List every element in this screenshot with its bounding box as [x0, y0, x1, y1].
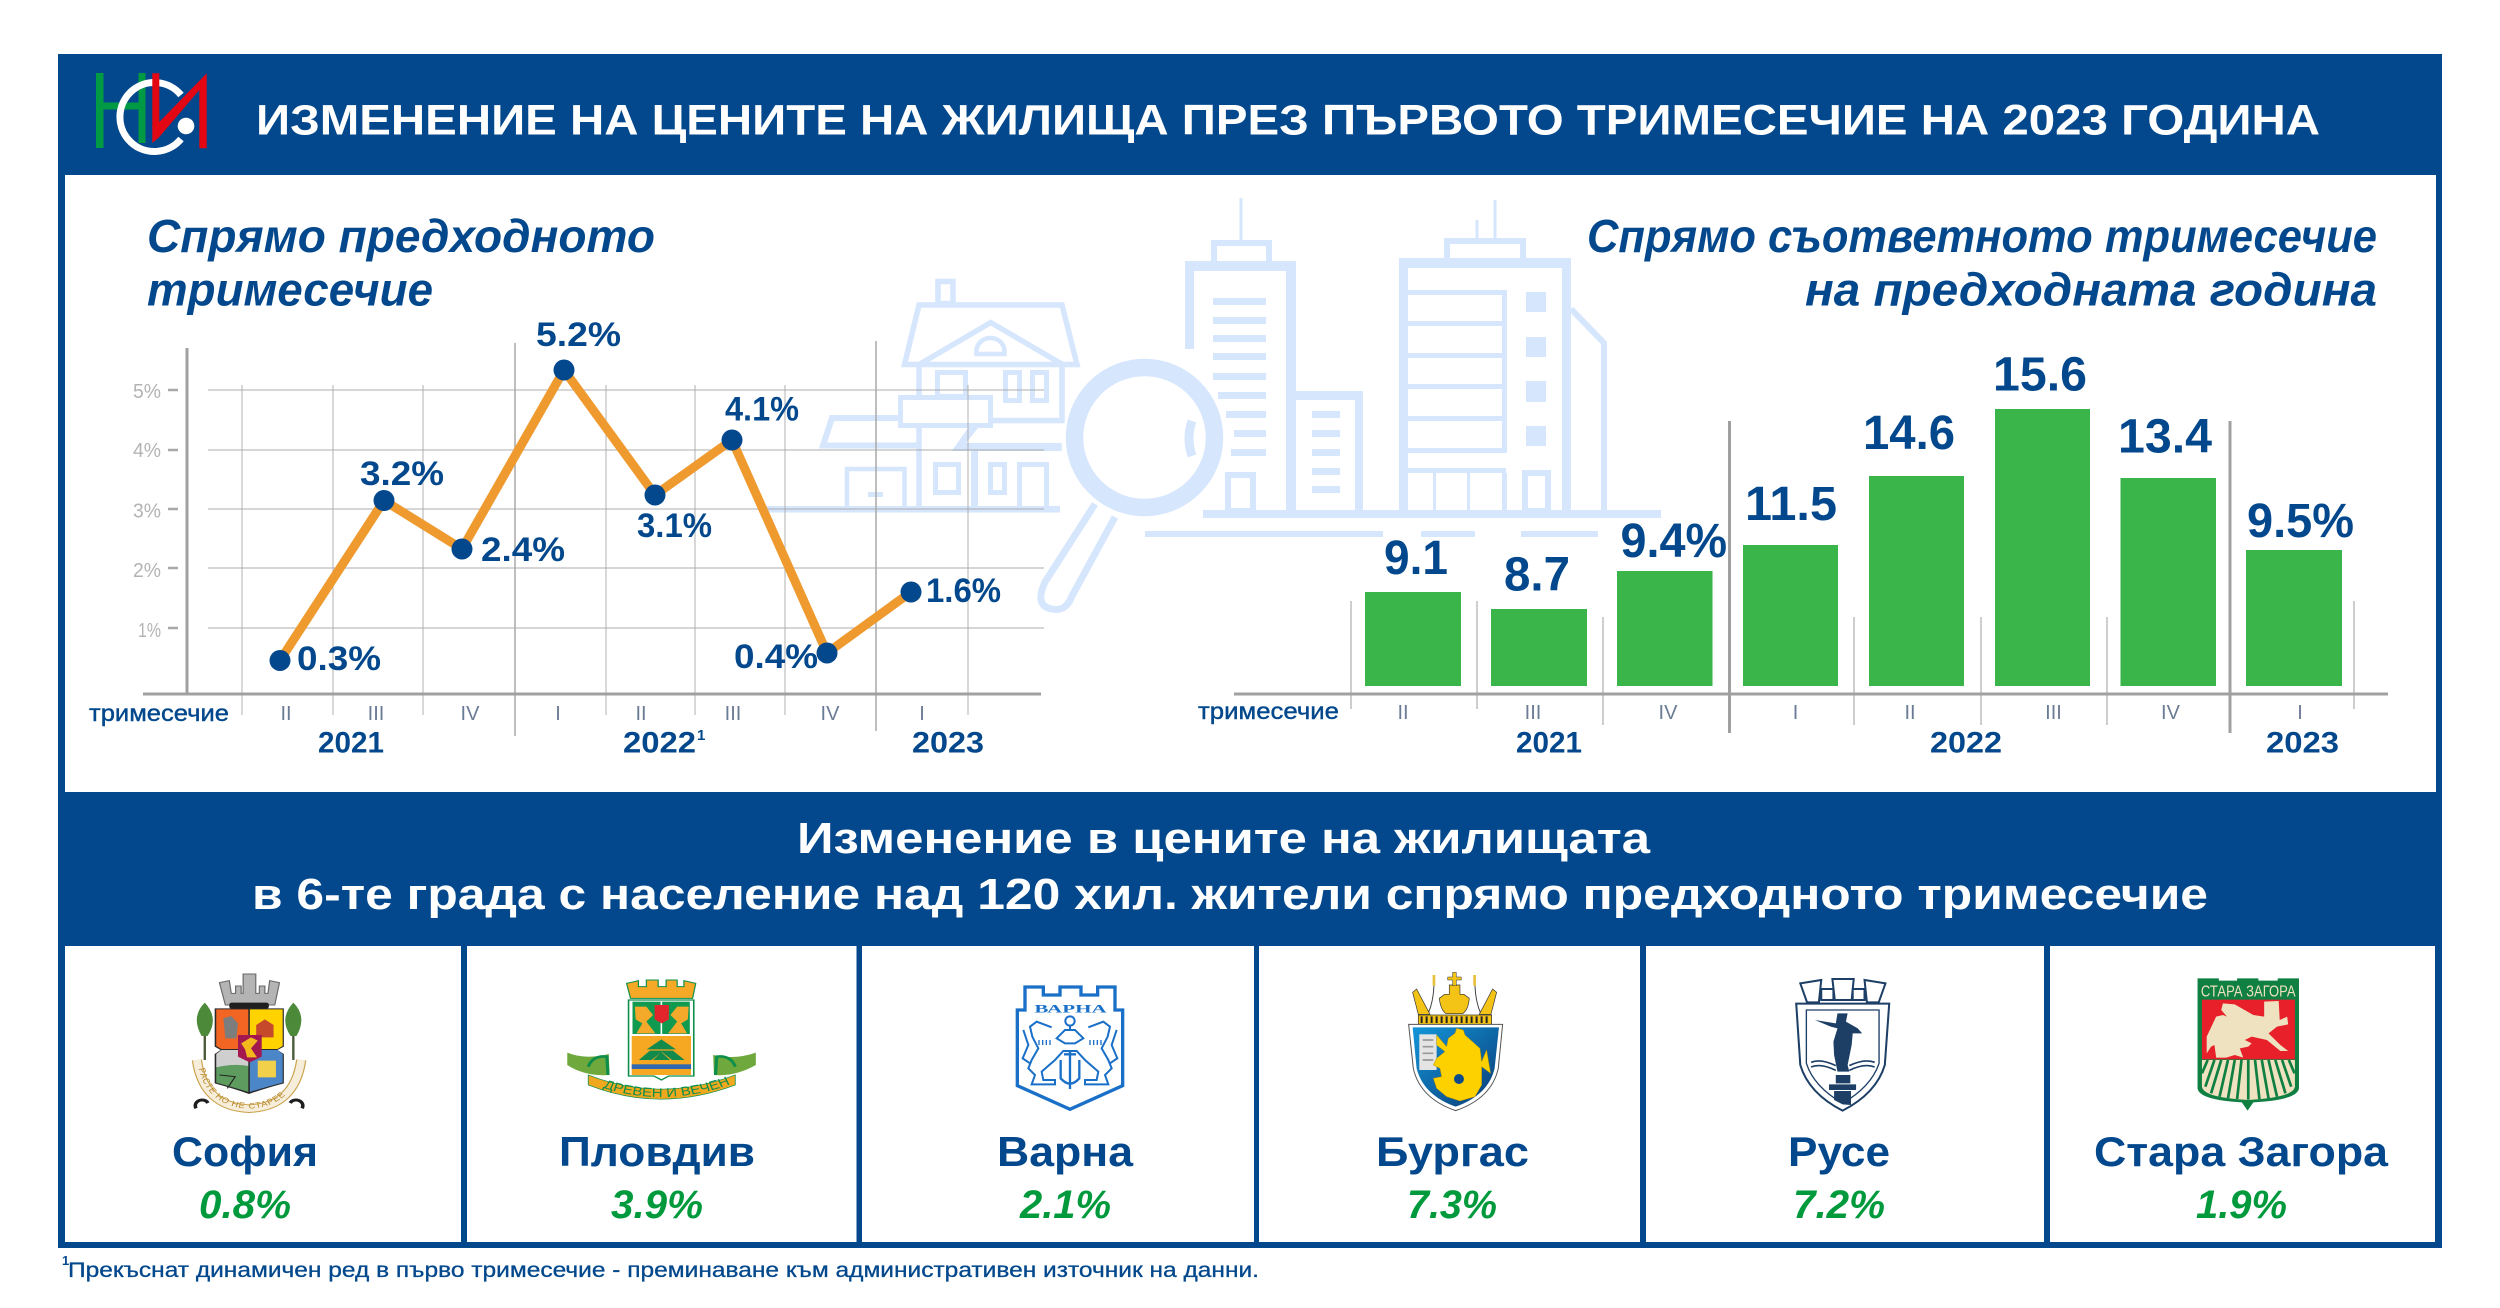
- icon: coat of arms Варна: [1017, 987, 1123, 1109]
- bar x axis labels: II: [1904, 702, 1916, 724]
- city name: Стара Загора: [2094, 1128, 2389, 1175]
- bar values: 11.5: [1745, 478, 1837, 531]
- cities heading band: в 6-те града с население над 120 хил. жители спрямо предходното тримесечие: [252, 870, 2208, 919]
- y axis labels: 5%: [133, 381, 161, 403]
- data labels: 3.1%: [637, 507, 712, 545]
- x axis labels: 1: [697, 727, 705, 744]
- x axis labels: III: [368, 703, 384, 725]
- x axis labels: тримесечие: [89, 700, 229, 726]
- bar x axis labels: II: [1397, 702, 1409, 724]
- panel: Русе: [1646, 946, 2044, 1242]
- data labels: 0.4%: [734, 638, 818, 676]
- right heading: Спрямо съответното тримесечие: [1587, 210, 2377, 262]
- bar values: 9.1: [1384, 532, 1448, 585]
- y axis labels: 1%: [138, 620, 161, 642]
- x axis labels: IV: [821, 703, 840, 725]
- y axis labels: [133, 381, 161, 642]
- y axis labels: 4%: [133, 440, 161, 462]
- icon: coat of arms Стара Загора: [2198, 978, 2299, 1111]
- x axis labels: II: [280, 703, 292, 725]
- footnote: Прекъснат динамичен ред в първо тримесечие - преминаване към административен източник на данни.: [68, 1259, 1259, 1282]
- x axis labels: 2023: [912, 726, 984, 760]
- left heading: тримесечие: [147, 264, 433, 316]
- line chart: quarter-on-quarter change: [89, 316, 1044, 760]
- bars: [1365, 409, 2342, 686]
- bar x axis labels: III: [1525, 702, 1541, 724]
- city name: Варна: [997, 1128, 1134, 1175]
- city name: Русе: [1788, 1128, 1890, 1175]
- panel: Варна: [862, 946, 1254, 1242]
- city name: Пловдив: [559, 1128, 755, 1175]
- footnote: 1: [62, 1253, 69, 1268]
- icon: coat of arms Пловдив: [567, 980, 756, 1100]
- data points: [270, 360, 922, 671]
- x axis labels: III: [725, 703, 741, 725]
- data labels: 0.3%: [297, 640, 381, 678]
- y axis labels: 2%: [133, 560, 161, 582]
- logo NSI: [96, 73, 207, 152]
- bar values: 14.6: [1863, 407, 1955, 460]
- city value: 1.9%: [2196, 1183, 2287, 1227]
- city value: 7.3%: [1407, 1183, 1497, 1227]
- x axis labels: I: [919, 703, 925, 725]
- right heading: на предходната година: [1805, 264, 2377, 316]
- bar x axis labels: I: [2297, 702, 2303, 724]
- x axis labels: IV: [461, 703, 480, 725]
- right heading: [1587, 210, 2377, 316]
- city value: 3.9%: [611, 1183, 703, 1227]
- x axis labels: 2022: [623, 726, 696, 760]
- bar x axis labels: [1198, 698, 2339, 760]
- bar values: 15.6: [1993, 348, 2087, 402]
- city name: Бургас: [1376, 1128, 1529, 1175]
- panel: Бургас: [1259, 946, 1640, 1242]
- data labels: 1.6%: [926, 572, 1001, 610]
- x axis labels: [89, 700, 984, 760]
- data line: [280, 370, 911, 660]
- icon: coat of arms София: [192, 974, 306, 1113]
- panel: София: [65, 946, 461, 1242]
- panel: Пловдив: [467, 946, 856, 1242]
- bar values: 9.5%: [2247, 495, 2354, 548]
- bar x axis labels: 2021: [1516, 726, 1582, 760]
- bar values: 9.4%: [1620, 515, 1727, 568]
- icon: coat of arms Бургас: [1409, 972, 1503, 1111]
- data labels: 3.2%: [360, 455, 444, 493]
- city value: 2.1%: [1019, 1183, 1111, 1227]
- bar x axis labels: IV: [2161, 702, 2181, 724]
- icon: coat of arms Русе: [1796, 979, 1889, 1111]
- footnote: [62, 1253, 1259, 1282]
- bar x axis labels: тримесечие: [1198, 698, 1339, 724]
- icon: coat of arms София: РАСТЕ НО НЕ СТАРЕЕ: [198, 1068, 286, 1108]
- bar values: [1384, 348, 2354, 602]
- bar x axis labels: I: [1793, 702, 1798, 724]
- bar x axis labels: IV: [1659, 702, 1678, 724]
- bar x axis labels: 2022: [1930, 726, 2002, 760]
- x axis labels: 2021: [318, 726, 384, 760]
- y axis labels: 3%: [133, 500, 161, 522]
- cities heading band: [252, 814, 2208, 919]
- bar chart: year-on-year change: [1198, 348, 2388, 760]
- x axis labels: II: [635, 703, 647, 725]
- left heading: Спрямо предходното: [147, 210, 655, 262]
- city value: 7.2%: [1793, 1183, 1885, 1227]
- bar values: 13.4: [2118, 410, 2212, 464]
- panel: Стара Загора: [2050, 946, 2435, 1242]
- data labels: [297, 316, 1001, 678]
- icon: coat of arms Стара Загора: СТАРА ЗАГОРА: [2201, 983, 2296, 1001]
- left heading: [147, 210, 655, 316]
- city value: 0.8%: [199, 1183, 291, 1227]
- background illustration: house, magnifier, city buildings: [766, 198, 1661, 609]
- title: ИЗМЕНЕНИЕ НА ЦЕНИТЕ НА ЖИЛИЩА ПРЕЗ ПЪРВОТО ТРИМЕСЕЧИЕ НА 2023 ГОДИНА: [256, 96, 2320, 144]
- data labels: 4.1%: [725, 390, 799, 428]
- bar values: 8.7: [1504, 548, 1570, 602]
- cities heading band: Изменение в цените на жилищата: [797, 814, 1651, 863]
- bar x axis labels: III: [2045, 702, 2062, 724]
- bar x axis labels: 2023: [2266, 726, 2339, 760]
- icon: coat of arms Варна: ВАРНА: [1034, 1001, 1107, 1015]
- header band: [96, 73, 2320, 152]
- data labels: 2.4%: [481, 531, 565, 569]
- icon: coat of arms Пловдив: ДРЕВЕН И ВЕЧЕН: [602, 1076, 730, 1098]
- city name: София: [172, 1128, 318, 1175]
- data labels: 5.2%: [536, 316, 621, 354]
- x axis labels: I: [555, 703, 561, 725]
